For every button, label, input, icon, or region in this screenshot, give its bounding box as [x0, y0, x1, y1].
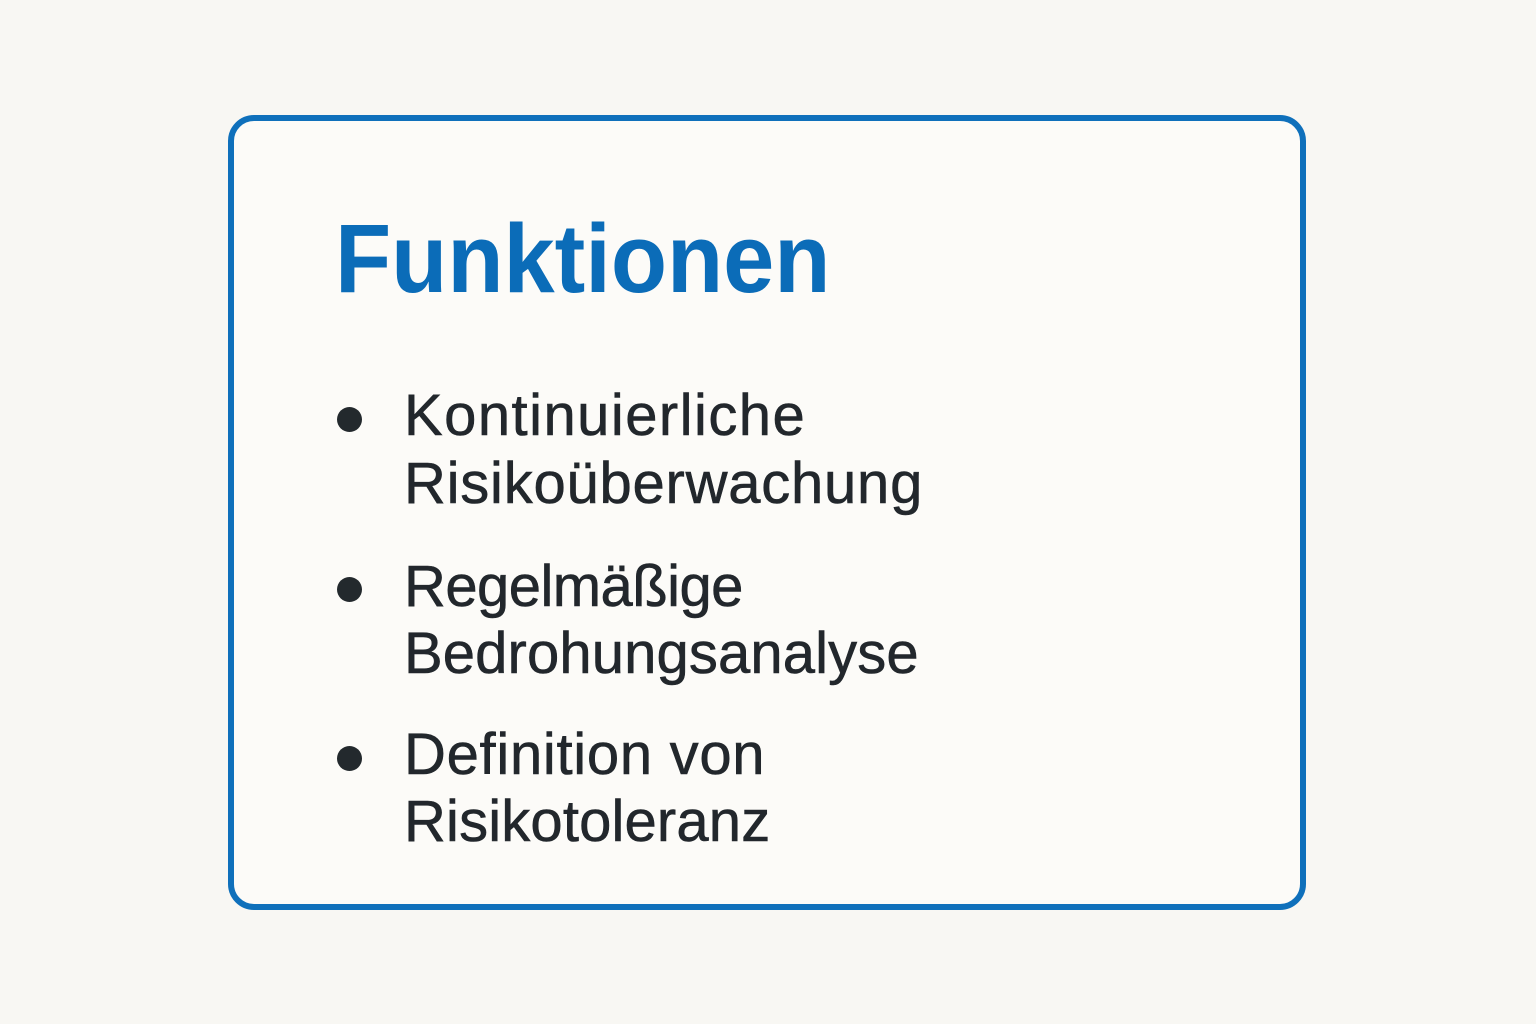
list item 3 — [404, 722, 770, 854]
panel: Funktionen card — [228, 115, 1306, 910]
bullet icon 1 — [337, 407, 362, 432]
title: Funktionen — [335, 204, 830, 313]
list item 2 — [404, 554, 919, 686]
list item 1 — [404, 383, 923, 516]
list item 3: Definition von — [404, 722, 765, 787]
bullet icon 3 — [337, 746, 362, 771]
list item 1: Risikoüberwachung — [404, 451, 923, 516]
bullet icon 2 — [337, 577, 362, 602]
list item 2: Regelmäßige — [404, 554, 743, 619]
list item 3: Risikotoleranz — [404, 789, 770, 854]
list item 1: Kontinuierliche — [404, 383, 806, 448]
list item 2: Bedrohungsanalyse — [404, 621, 919, 686]
